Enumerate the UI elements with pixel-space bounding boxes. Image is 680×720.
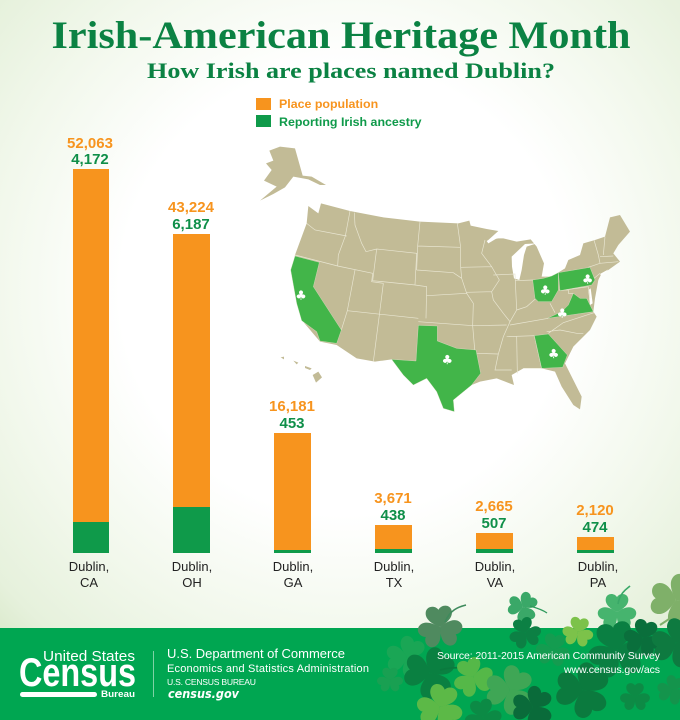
bar: Dublin, CA: [67, 135, 113, 590]
footer band: [0, 628, 680, 720]
bar: Dublin, GA: Dublin,: [273, 559, 313, 574]
clover markers: ♣: [557, 305, 568, 320]
California: [291, 256, 341, 343]
US map: [260, 147, 630, 412]
clover markers: ♣: [548, 346, 559, 361]
bar: Dublin, TX: 438: [380, 507, 406, 524]
clover markers: ♣: [540, 283, 551, 298]
state borders: [295, 211, 618, 373]
bar: Dublin, PA: Dublin,: [578, 559, 618, 574]
source note: [437, 650, 661, 676]
agency text: census.gov: [168, 686, 240, 701]
Texas: [392, 325, 481, 412]
clover markers: [295, 272, 593, 367]
bar: Dublin, GA: GA: [284, 575, 303, 590]
bar: Dublin, GA: 16,181: [269, 398, 315, 415]
clover markers: ♣: [442, 352, 453, 367]
bar: Dublin, PA: 2,120: [576, 502, 614, 519]
bar: Dublin, CA: CA: [80, 575, 98, 590]
clover markers: ♣: [295, 288, 307, 303]
bar: Dublin, VA: VA: [487, 575, 504, 590]
bar: Dublin, GA: [269, 398, 315, 590]
clover markers: ♣: [582, 272, 593, 287]
bar: Dublin, PA: [576, 502, 618, 590]
bar: Dublin, OH: 43,224: [168, 199, 215, 216]
Pennsylvania: [558, 267, 595, 291]
agency text: [167, 646, 369, 701]
bar: Dublin, OH: 6,187: [172, 216, 210, 233]
bar: Dublin, PA: 474: [582, 519, 608, 536]
agency text: Economics and Statistics Administration: [167, 663, 369, 675]
legend: [256, 97, 422, 129]
legend: place population: Place population: [279, 97, 378, 111]
shamrock decoration: [376, 563, 680, 720]
Virginia: [547, 293, 593, 318]
Ohio: [533, 273, 558, 302]
bar: Dublin, CA: 4,172: [71, 151, 109, 168]
agency text: U.S. Department of Commerce: [167, 646, 345, 661]
Census Bureau logo: United States: [43, 648, 135, 665]
legend: reporting Irish ancestry: Reporting Irish ancestry: [279, 115, 422, 129]
bar: Dublin, VA: 2,665: [475, 498, 513, 515]
Census Bureau logo: Census: [19, 651, 136, 695]
bar: Dublin, CA: 52,063: [67, 135, 113, 152]
bar: Dublin, VA: 507: [481, 515, 507, 532]
bar: Dublin, TX: 3,671: [374, 490, 412, 507]
agency text: U.S. CENSUS BUREAU: [167, 677, 256, 687]
bar: Dublin, CA: Dublin,: [69, 559, 109, 574]
Hawaii: [281, 357, 322, 383]
contiguous states: [292, 203, 630, 412]
Census Bureau logo: Bureau: [101, 689, 135, 700]
source note: www.census.gov/acs: [563, 664, 660, 676]
bar: Dublin, OH: Dublin,: [172, 559, 212, 574]
bar: Dublin, OH: OH: [182, 575, 202, 590]
bar chart: [67, 135, 618, 590]
bar: Dublin, GA: 453: [279, 415, 305, 432]
subtitle: How Irish are places named Dublin?: [147, 58, 555, 83]
Georgia: [534, 334, 567, 368]
highlighted states: [291, 256, 595, 412]
bar: Dublin, VA: Dublin,: [475, 559, 515, 574]
Alaska: [260, 147, 326, 201]
bar: Dublin, VA: [475, 498, 515, 590]
divider: [153, 651, 154, 697]
bar: Dublin, TX: TX: [386, 575, 403, 590]
bar: Dublin, PA: PA: [590, 575, 607, 590]
bar: Dublin, TX: Dublin,: [374, 559, 414, 574]
title: Irish-American Heritage Month: [52, 14, 631, 57]
bar: Dublin, OH: [168, 199, 215, 590]
source note: Source: 2011-2015 American Community Survey: [437, 650, 661, 662]
bar: Dublin, TX: [374, 490, 414, 590]
Great Lakes: [487, 229, 608, 305]
